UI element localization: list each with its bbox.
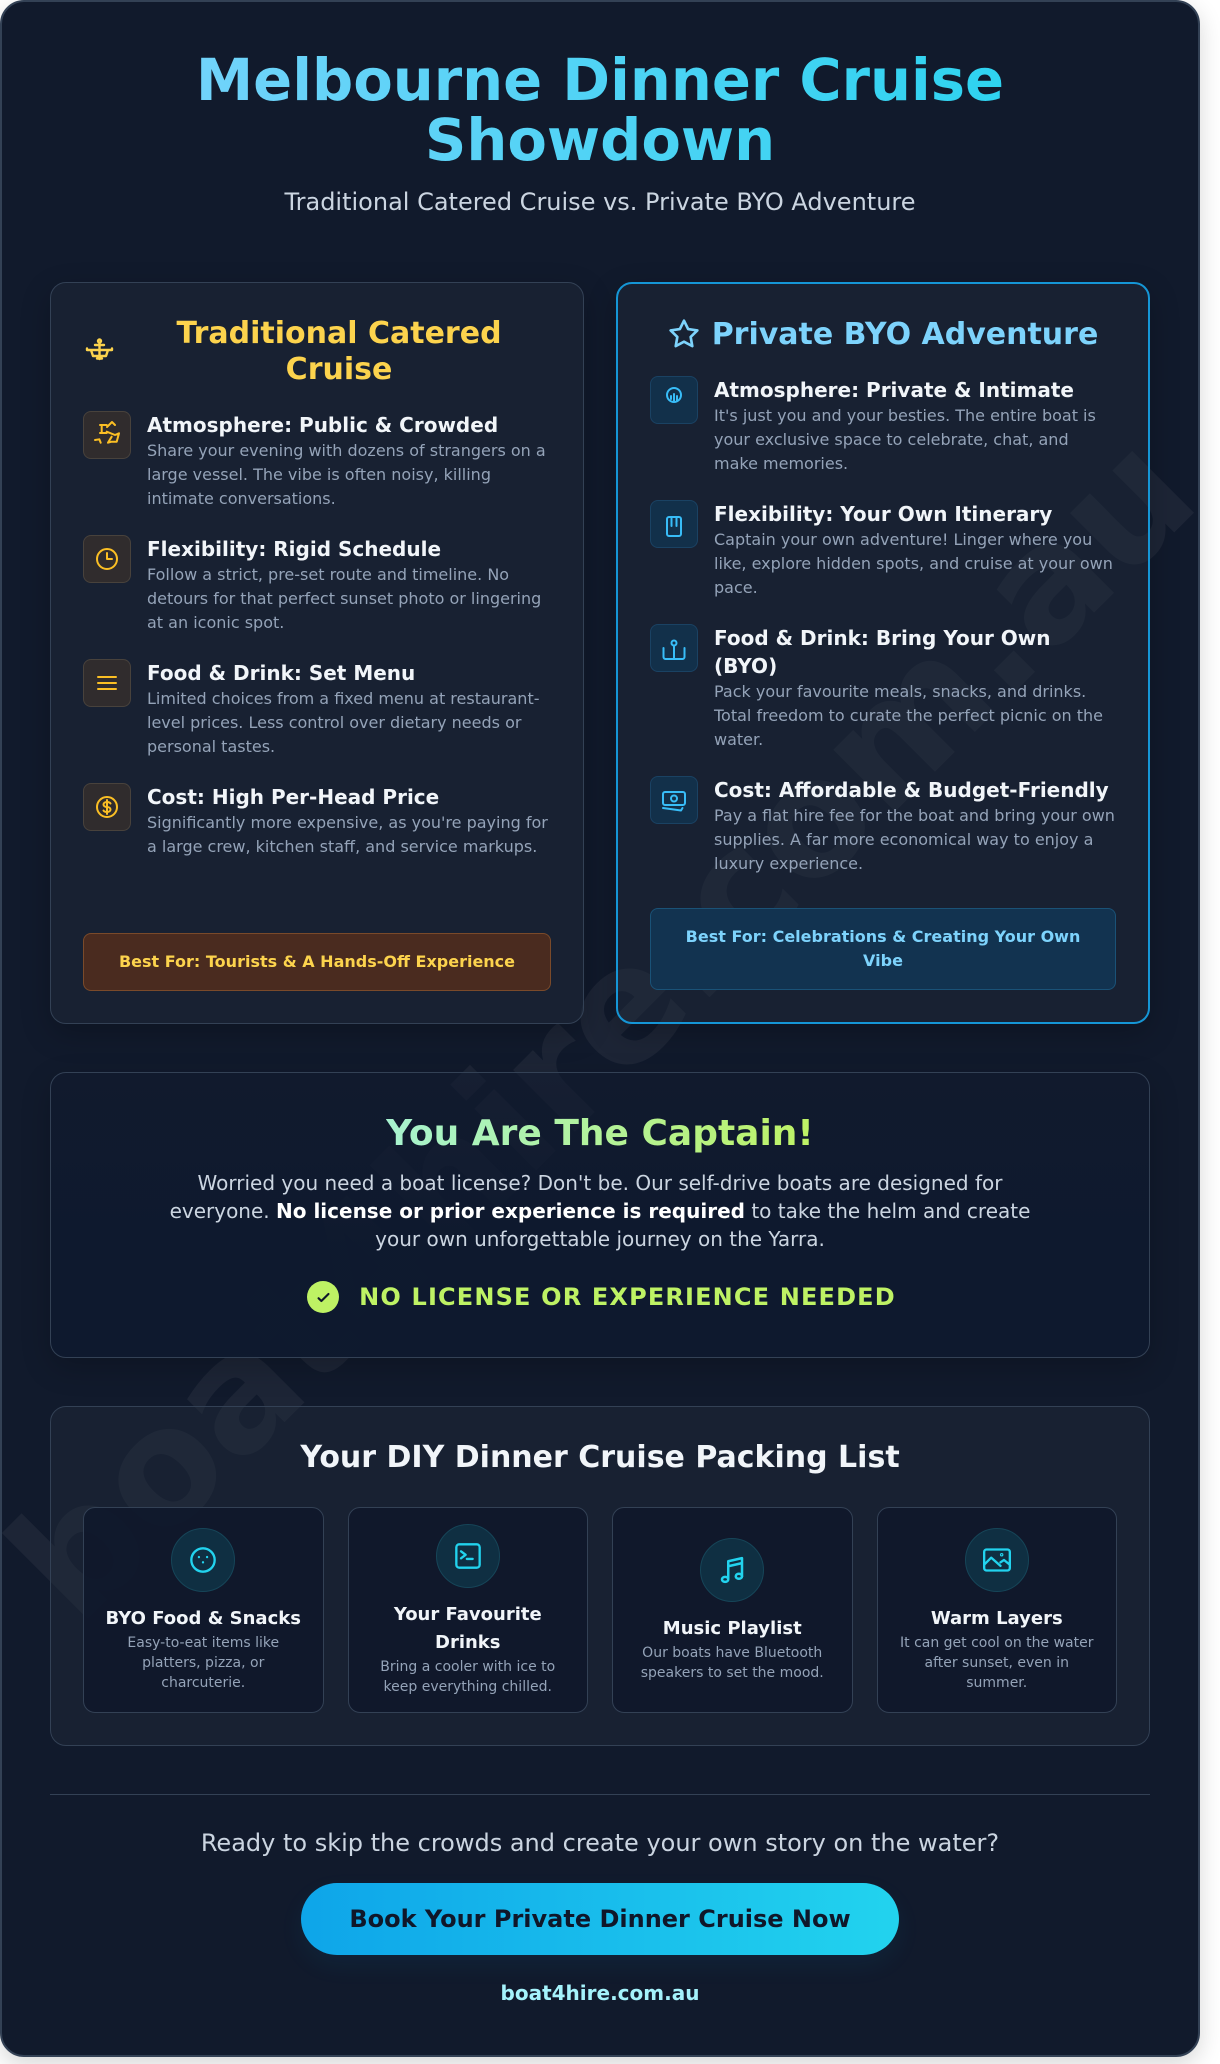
website: boat4hire.com.au — [501, 1981, 699, 2005]
item: flexibility own: Flexibility: Your Own Itinerary — [714, 502, 1052, 526]
tile: warm layers — [876, 1507, 1117, 1713]
tile: music: Music Playlist — [663, 1618, 802, 1639]
panel: traditional catered cruise — [50, 282, 584, 1024]
tile: drinks: Your Favourite Drinks — [394, 1604, 542, 1653]
item: atmosphere public: Atmosphere: Public & Crowded — [147, 413, 498, 437]
panel: you are the captain — [50, 1072, 1150, 1358]
item: cost affordable — [650, 776, 1115, 873]
icon: book — [650, 500, 698, 548]
packing list grid — [83, 1507, 1117, 1713]
icon: crowd — [83, 411, 131, 459]
item: flexibility rigid: Follow a strict, pre-set route and timeline. No detours for that perfect sunset photo or lingering at an iconic spot. — [147, 565, 541, 632]
tile: food and snacks — [83, 1507, 324, 1713]
item: cost high: Cost: High Per-Head Price — [147, 785, 439, 809]
item: flexibility own: Captain your own adventure! Linger where you like, explore hidden spots, and cruise at your own pace. — [714, 530, 1113, 597]
item: food BYO: Pack your favourite meals, snacks, and drinks. Total freedom to curate the perfect picnic on the water. — [714, 682, 1103, 749]
button: book now: Book Your Private Dinner Cruise Now — [349, 1905, 851, 1933]
item: food BYO: Food & Drink: Bring Your Own (BYO) — [714, 626, 1050, 678]
item: atmosphere private: It's just you and your besties. The entire boat is your exclusive space to celebrate, chat, and make memories. — [714, 406, 1096, 473]
icon: face — [171, 1528, 235, 1592]
panel heading: private: Private BYO Adventure — [712, 317, 1098, 352]
item: food set menu: Food & Drink: Set Menu — [147, 661, 415, 685]
icon: star — [669, 319, 699, 348]
button: book now — [301, 1883, 899, 1955]
tile: food and snacks: Easy-to-eat items like platters, pizza, or charcuterie. — [127, 1635, 279, 1691]
tile: warm layers: Warm Layers — [931, 1608, 1063, 1629]
icon: dollar — [83, 783, 131, 831]
heading: captain: You Are The Captain! — [386, 1113, 814, 1154]
panel: packing list — [50, 1406, 1150, 1746]
item: food BYO — [650, 624, 1103, 749]
panel: private BYO adventure — [616, 282, 1150, 1024]
icon: anchor — [650, 624, 698, 672]
item: atmosphere public — [83, 411, 546, 508]
panel heading: traditional: Traditional Catered Cruise — [176, 316, 502, 387]
callout: best for celebrations — [650, 908, 1116, 990]
badge: no license needed: NO LICENSE OR EXPERIENCE NEEDED — [359, 1283, 896, 1311]
callout: best for tourists: Best For: Tourists & A Hands-Off Experience — [119, 952, 515, 971]
tile: food and snacks: BYO Food & Snacks — [106, 1608, 301, 1629]
tile: drinks — [348, 1507, 588, 1713]
item: food set menu — [83, 659, 540, 756]
item: cost high: Significantly more expensive, as you're paying for a large crew, kitchen staff, and service markups. — [147, 813, 548, 856]
icon: image — [965, 1528, 1029, 1592]
icon: terminal — [436, 1524, 500, 1588]
item: atmosphere private — [650, 376, 1096, 473]
item: flexibility own — [650, 500, 1113, 597]
heading: packing list: Your DIY Dinner Cruise Packing List — [300, 1440, 900, 1475]
callout: best for celebrations: Best For: Celebrations & Creating Your Own Vibe — [686, 927, 1080, 970]
subtitle: Traditional Catered Cruise vs. Private BYO Adventure — [284, 188, 916, 216]
icon: music notes — [700, 1538, 764, 1602]
item: cost high — [83, 783, 548, 856]
tile: music: Our boats have Bluetooth speakers to set the mood. — [641, 1645, 824, 1681]
icon: intimate — [650, 376, 698, 424]
item: flexibility rigid: Flexibility: Rigid Schedule — [147, 537, 441, 561]
item: cost affordable: Pay a flat hire fee for the boat and bring your own supplies. A far more economical way to enjoy a luxury experience. — [714, 806, 1115, 873]
tile: drinks: Bring a cooler with ice to keep everything chilled. — [380, 1659, 555, 1695]
item: cost affordable: Cost: Affordable & Budget-Friendly — [714, 778, 1109, 802]
item: atmosphere private: Atmosphere: Private & Intimate — [714, 378, 1074, 402]
text: no license explanation: Worried you need a boat license? Don't be. Our self-drive boats are designed for everyone. No license or prior experience is required to take the helm and create your own unforgettable journey on the Yarra. — [170, 1171, 1030, 1251]
icon: boat — [86, 338, 114, 360]
item: atmosphere public: Share your evening with dozens of strangers on a large vessel. The vibe is often noisy, killing intimate conversations. — [147, 441, 546, 508]
title: Melbourne Dinner Cruise Showdown — [196, 47, 1004, 174]
callout: best for tourists — [83, 933, 551, 991]
item: food set menu: Limited choices from a fixed menu at restaurant-level prices. Less control over dietary needs or personal tastes. — [147, 689, 540, 756]
icon: banknote — [650, 776, 698, 824]
icon: clock — [83, 535, 131, 583]
tile: music — [612, 1507, 852, 1713]
item: flexibility rigid — [83, 535, 541, 632]
call to action text: Ready to skip the crowds and create your own story on the water? — [201, 1829, 999, 1857]
tile: warm layers: It can get cool on the water after sunset, even in summer. — [900, 1635, 1093, 1691]
icon: menu — [83, 659, 131, 707]
